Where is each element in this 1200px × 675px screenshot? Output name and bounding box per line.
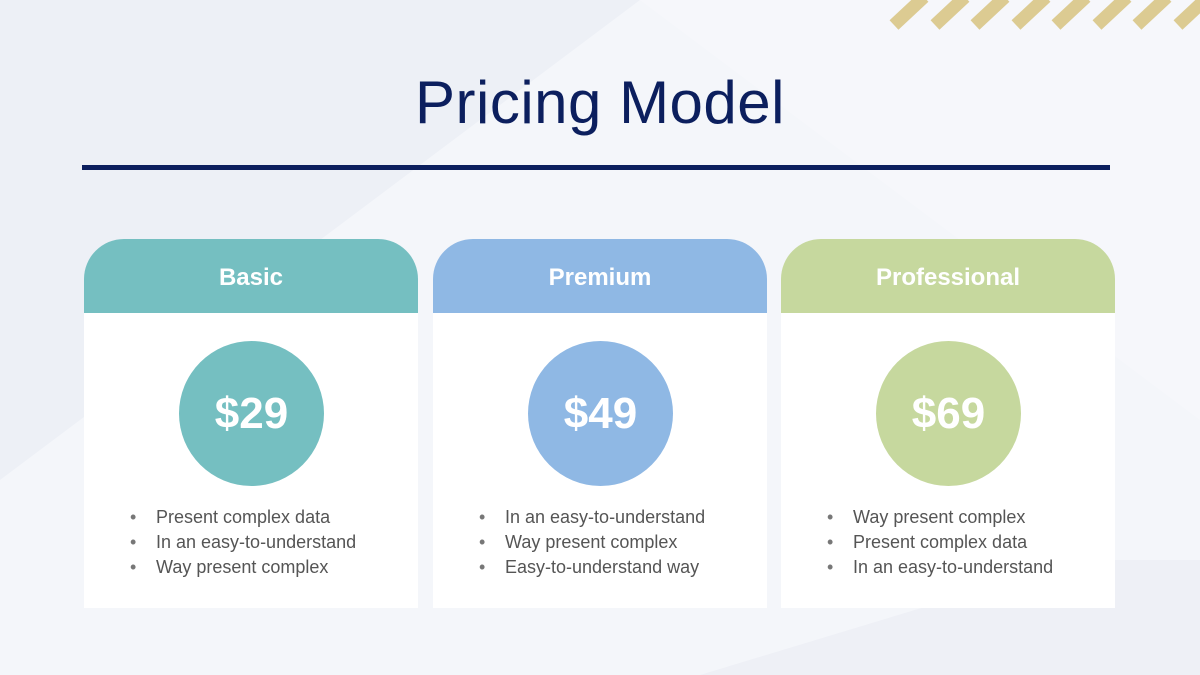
header: Premium	[433, 239, 767, 313]
title: Pricing Model	[415, 69, 785, 136]
bullet list	[828, 507, 1053, 577]
price circle: $49	[564, 389, 637, 438]
bullet list: In an easy-to-understand	[156, 532, 356, 552]
panel: premium	[433, 239, 767, 608]
decorative stripes	[890, 0, 1200, 30]
bullet list	[130, 507, 356, 577]
price circle	[179, 341, 324, 486]
header: Premium: Premium	[549, 264, 651, 291]
panel: professional	[781, 239, 1115, 608]
bullet list: Easy-to-understand way	[505, 557, 699, 577]
bullet list: In an easy-to-understand	[505, 507, 705, 527]
header: Professional: Professional	[876, 264, 1020, 291]
price circle: $29	[215, 389, 288, 438]
bullet list: Way present complex	[505, 532, 677, 552]
price circle: $69	[912, 389, 985, 438]
header: Professional	[781, 239, 1115, 313]
panel: basic	[84, 239, 418, 608]
price circle	[528, 341, 673, 486]
price circle	[876, 341, 1021, 486]
bullet list: Present complex data	[853, 532, 1027, 552]
bullet list: Way present complex	[156, 557, 328, 577]
bullet list: Way present complex	[853, 507, 1025, 527]
header: Basic	[84, 239, 418, 313]
bullet list: In an easy-to-understand	[853, 557, 1053, 577]
bullet list: Present complex data	[156, 507, 330, 527]
bullet list	[480, 507, 705, 577]
header: Basic: Basic	[219, 264, 283, 291]
